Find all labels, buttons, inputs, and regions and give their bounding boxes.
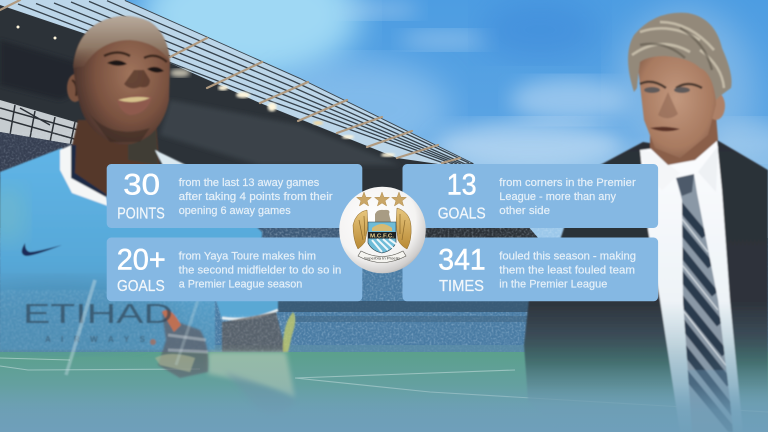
background: crowd stand bbox=[0, 132, 768, 354]
mouth bbox=[117, 95, 152, 115]
badge: Manchester City crest bbox=[339, 187, 426, 273]
panel: 13 goals: GOALS bbox=[438, 205, 486, 222]
left stand truss bbox=[0, 100, 82, 146]
manager: Manuel Pellegrini bbox=[524, 13, 768, 432]
nose and mouth bbox=[658, 92, 678, 118]
eyes bbox=[107, 60, 127, 66]
panel: 20+ goals: the second midfielder to do so in bbox=[179, 264, 341, 276]
sponsor: Etihad bbox=[23, 298, 173, 344]
panel: 341 times: TIMES bbox=[439, 278, 484, 295]
nike swoosh bbox=[22, 243, 62, 256]
eagle head bbox=[375, 210, 391, 222]
scalp bbox=[73, 16, 170, 68]
collar bbox=[60, 145, 108, 206]
panel: 341 times: fouled this season - making bbox=[499, 250, 636, 262]
panel: 341 times: in the Premier League bbox=[499, 279, 607, 291]
panel: 341 times bbox=[402, 238, 658, 301]
shirt bbox=[640, 140, 743, 432]
sponsor: Etihad: ETIHAD bbox=[23, 298, 173, 329]
stars bbox=[357, 192, 406, 206]
background: stadium roof bbox=[0, 0, 540, 240]
panel: 30 points: after taking 4 points from their bbox=[179, 191, 333, 203]
panel: 13 goals bbox=[402, 164, 658, 228]
suit bbox=[524, 140, 768, 432]
sleeve bbox=[216, 300, 278, 320]
panel: 13 goals: League - more than any bbox=[499, 191, 616, 203]
hair bbox=[628, 13, 732, 100]
ear bbox=[67, 74, 83, 102]
head bbox=[73, 16, 170, 145]
player: Yaya Toure bbox=[0, 16, 295, 413]
panel: 20+ goals: GOALS bbox=[117, 278, 165, 295]
panel: 13 goals: 13 bbox=[447, 168, 477, 201]
tie bbox=[675, 173, 732, 432]
panel: 20+ goals bbox=[107, 238, 362, 301]
jersey bbox=[0, 148, 262, 350]
neck bbox=[650, 115, 718, 165]
background: sky bbox=[0, 0, 768, 300]
panel: 13 goals: other side bbox=[499, 205, 550, 217]
panel: 30 points: 30 bbox=[123, 168, 160, 201]
panel: 30 points: from the last 13 away games bbox=[179, 177, 320, 189]
ribbon bbox=[358, 251, 406, 262]
panel: 20+ goals: 20+ bbox=[117, 243, 166, 276]
sponsor: Etihad: A I R W A Y S bbox=[45, 335, 146, 344]
panel: 341 times: them the least fouled team bbox=[499, 264, 635, 276]
glove bbox=[283, 312, 295, 352]
panel: 341 times: 341 bbox=[438, 243, 486, 276]
background: pitch bbox=[0, 352, 768, 432]
badge: Manchester City crest: M.C.F.C. bbox=[370, 234, 395, 240]
brows and eyes bbox=[640, 82, 702, 88]
badge: Manchester City crest: Superbia In Proelio bbox=[364, 256, 401, 261]
panel: 30 points: POINTS bbox=[117, 205, 165, 222]
neck bbox=[71, 120, 160, 197]
nose bbox=[124, 70, 150, 88]
wings bbox=[353, 210, 368, 249]
ear bbox=[707, 92, 725, 120]
panel: 30 points: opening 6 away games bbox=[179, 205, 291, 217]
panel: 30 points bbox=[107, 164, 362, 228]
hand bbox=[158, 310, 208, 378]
forearm bbox=[222, 312, 286, 352]
shield bbox=[368, 222, 396, 253]
panel: 13 goals: from corners in the Premier bbox=[499, 177, 636, 189]
face bbox=[636, 50, 716, 158]
panel: 20+ goals: a Premier League season bbox=[179, 279, 302, 291]
beard shadow bbox=[88, 112, 150, 142]
stadium lights bbox=[16, 26, 395, 157]
panel: 20+ goals: from Yaya Toure makes him bbox=[179, 250, 316, 262]
fade overlay bbox=[0, 345, 768, 432]
